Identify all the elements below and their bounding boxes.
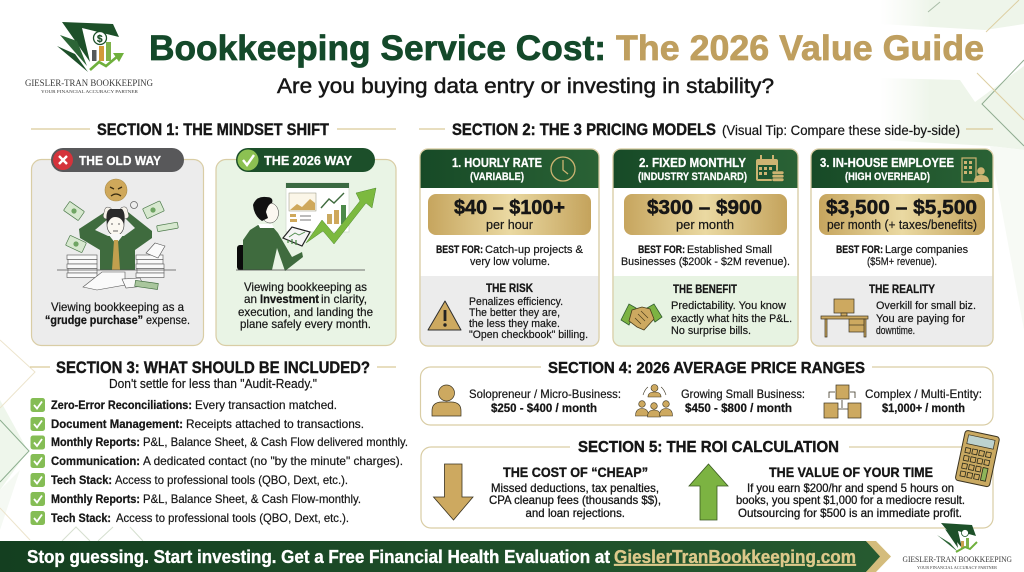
logo: Giesler-Tran Bookkeeping <box>25 22 153 94</box>
checklist items: Monthly Reports: <box>51 492 140 506</box>
call to action: Stop guessing. Start investing. Get a Free Financial Health Evaluation at <box>27 547 610 567</box>
icon: building and employee <box>962 158 989 182</box>
best for: hourly: very low volume. <box>470 256 550 268</box>
the risk: the less they make. <box>469 318 560 330</box>
price: in-house: $3,500 – $5,500 <box>826 196 977 219</box>
section 4 heading: SECTION 4: 2026 AVERAGE PRICE RANGES <box>548 360 865 377</box>
the risk: "Open checkbook" billing. <box>469 329 588 341</box>
complex multi-entity text: Complex / Multi-Entity: <box>865 387 982 401</box>
value of your time text <box>736 465 965 520</box>
icon: clock <box>551 157 575 181</box>
header text: (VARIABLE) <box>470 171 524 183</box>
best for: in-house: BEST FOR: <box>836 244 883 256</box>
2026 way caption <box>238 280 373 331</box>
growing small business text <box>681 387 805 415</box>
footer chevron <box>866 541 891 572</box>
arrow: cost going down <box>434 464 473 520</box>
the benefit: THE BENEFIT <box>673 282 738 296</box>
section 2 heading: (Visual Tip: Compare these side-by-side) <box>722 123 960 138</box>
title: Bookkeeping Service Cost: <box>149 29 606 68</box>
checklist items: Receipts attached to transactions. <box>186 417 364 431</box>
footer logo: GIESLER-TRAN BOOKKEEPING <box>902 554 1012 564</box>
checklist items: P&L, Balance Sheet, & Cash Flow-monthly. <box>143 492 361 506</box>
checklist items: Document Management: <box>51 417 183 431</box>
checklist items: Monthly Reports: <box>51 435 140 449</box>
price: hourly: $40 – $100+ <box>454 196 565 219</box>
2026 way pill: THE 2026 WAY <box>264 153 352 168</box>
header text: (HIGH OVERHEAD) <box>845 171 930 183</box>
checklist items: Tech Stack: <box>51 473 112 487</box>
panel: the 2026 way <box>216 148 396 346</box>
section 1 heading: SECTION 1: THE MINDSET SHIFT <box>97 121 329 139</box>
the benefit: exactly what hits the P&L. <box>671 313 792 325</box>
the benefit: Predictability. You know <box>671 300 786 312</box>
checklist items: Communication: <box>51 454 140 468</box>
2026 way caption: an <box>244 292 257 306</box>
logo: Giesler-Tran Bookkeeping: YOUR FINANCIAL ACCURACY PARTNER <box>41 89 139 94</box>
value of your time text: Outsourcing for $500 is an immediate profit. <box>738 506 962 520</box>
money <box>63 201 178 253</box>
checklist items <box>51 398 408 525</box>
the reality <box>869 282 976 337</box>
section 3 heading: Don't settle for less than "Audit-Ready." <box>109 377 317 391</box>
the risk <box>469 281 588 341</box>
best for: monthly: BEST FOR: <box>638 244 685 256</box>
checklist items: Tech Stack: <box>51 511 111 525</box>
price: monthly: per month <box>676 218 734 232</box>
cost of cheap text: and loan rejections. <box>526 506 625 520</box>
illustration: stressed man with paper stacks <box>57 179 178 290</box>
the reality: Overkill for small biz. <box>876 300 976 312</box>
2026 way caption: plane safely every month. <box>240 317 371 331</box>
solopreneur text: $250 - $400 / month <box>491 401 597 415</box>
section 2 heading: SECTION 2: THE 3 PRICING MODELS <box>452 121 716 139</box>
2026 way caption: Investment <box>260 292 319 306</box>
header text: 1. HOURLY RATE <box>452 156 542 170</box>
best for: monthly: Established Small <box>687 244 772 256</box>
best for: in-house <box>836 244 968 268</box>
the risk: The better they are, <box>469 307 560 319</box>
panel: hourly rate <box>420 149 599 346</box>
2026 way pill <box>236 148 375 172</box>
the benefit: No surprise bills. <box>671 325 751 337</box>
header text: 2. FIXED MONTHLY <box>639 156 747 170</box>
section 5 heading: SECTION 5: THE ROI CALCULATION <box>578 439 839 456</box>
best for: monthly <box>621 244 790 268</box>
icon: logo fan and chart: $ <box>97 34 103 45</box>
section 5: ROI calculation <box>421 430 1000 528</box>
price: monthly <box>624 194 787 235</box>
old way pill: THE OLD WAY <box>79 153 161 168</box>
complex multi-entity text <box>865 387 982 415</box>
2026 way caption: in clarity, <box>321 292 367 306</box>
header text: (INDUSTRY STANDARD) <box>638 171 747 183</box>
header text <box>820 156 954 183</box>
panel: in-house employee <box>811 149 993 346</box>
section 4: price ranges <box>420 360 993 425</box>
checkmark icons <box>30 398 45 525</box>
growing small business text: $450 - $800 / month <box>685 401 792 415</box>
checklist items: Access to professional tools (QBO, Dext, etc.). <box>116 511 349 525</box>
subtitle: Are you buying data entry or investing in stability? <box>277 74 774 98</box>
section 2 heading <box>419 121 993 139</box>
value of your time text: THE VALUE OF YOUR TIME <box>769 465 933 480</box>
value of your time text: books, you spent $1,000 for a mediocre result. <box>736 493 965 507</box>
old way caption: Viewing bookkeeping as a <box>51 300 184 314</box>
icon: handshake <box>621 304 662 330</box>
header text <box>452 156 542 183</box>
icon: group of people <box>636 384 672 417</box>
price: hourly: per hour <box>486 218 533 232</box>
price: monthly: $300 – $900 <box>647 196 762 219</box>
price: in-house: per month (+ taxes/benefits) <box>827 218 977 232</box>
cost of cheap text <box>489 465 661 520</box>
2026 way caption: execution, and landing the <box>238 305 373 319</box>
the reality: THE REALITY <box>869 282 935 296</box>
icon: empty desk <box>821 299 868 337</box>
arrow: value going up <box>689 464 728 520</box>
old way caption: “grudge purchase” <box>45 313 143 327</box>
value of your time text: If you earn $200/hr and spend 5 hours on <box>747 481 954 495</box>
panel: the old way <box>32 148 204 346</box>
best for: in-house: Large companies <box>885 244 968 256</box>
section 3 heading <box>30 358 396 391</box>
old way caption <box>45 300 190 327</box>
icon: warning triangle <box>428 301 461 330</box>
section 3: what should be included <box>30 358 408 525</box>
best for: hourly: Catch-up projects & <box>485 244 584 256</box>
illustration: person with dashboard and rising arrow <box>236 183 376 271</box>
header text <box>638 156 747 183</box>
best for: in-house: ($5M+ revenue). <box>867 256 937 268</box>
checklist items: Zero-Error Reconciliations: <box>51 398 192 412</box>
the reality: You are paying for <box>876 313 965 325</box>
cost of cheap text: THE COST OF “CHEAP” <box>503 465 648 480</box>
solopreneur text <box>469 387 621 415</box>
checklist items: P&L, Balance Sheet, & Cash Flow delivered monthly. <box>143 435 408 449</box>
icon: calculator <box>955 430 1000 487</box>
cost of cheap text: Missed deductions, tax penalties, <box>491 481 659 495</box>
complex multi-entity text: $1,000+ / month <box>882 401 965 415</box>
icon: calendar and coins <box>756 155 784 182</box>
paper stacks <box>67 243 165 290</box>
checklist items: A dedicated contact (no "by the minute" charges). <box>143 454 403 468</box>
checklist items: Every transaction matched. <box>195 398 337 412</box>
checklist items: Access to professional tools (QBO, Dext, etc.). <box>115 473 348 487</box>
best for: hourly: BEST FOR: <box>436 244 483 256</box>
icon: connected buildings <box>824 385 861 418</box>
the reality: downtime. <box>876 325 915 337</box>
the benefit <box>671 282 792 337</box>
footer logo: YOUR FINANCIAL ACCURACY PARTNER <box>917 565 997 570</box>
the risk: Penalizes efficiency. <box>469 296 563 308</box>
footer banner <box>0 541 891 572</box>
title: The 2026 Value Guide <box>616 29 984 68</box>
section 3 heading: SECTION 3: WHAT SHOULD BE INCLUDED? <box>56 358 370 377</box>
the risk: THE RISK <box>486 281 533 295</box>
panel: fixed monthly <box>613 149 798 346</box>
solopreneur text: Solopreneur / Micro-Business: <box>469 387 621 401</box>
title <box>149 29 984 68</box>
logo: Giesler-Tran Bookkeeping: GIESLER-TRAN BOOKKEEPING <box>25 79 153 89</box>
header text: 3. IN-HOUSE EMPLOYEE <box>820 156 954 170</box>
best for: monthly: Businesses ($200k - $2M revenue). <box>621 256 790 268</box>
old way caption: expense. <box>146 313 190 327</box>
price: hourly <box>428 194 591 235</box>
icon: solo person <box>432 385 461 416</box>
cost of cheap text: CPA cleanup fees (thousands $$), <box>489 493 661 507</box>
website link: GieslerTranBookkeeping.com <box>614 547 856 567</box>
price: in-house <box>819 194 985 235</box>
2026 way caption: Viewing bookkeeping as <box>244 280 367 294</box>
old way pill <box>51 148 184 172</box>
footer logo <box>892 523 1024 572</box>
best for: hourly <box>436 244 584 268</box>
growing small business text: Growing Small Business: <box>681 387 805 401</box>
